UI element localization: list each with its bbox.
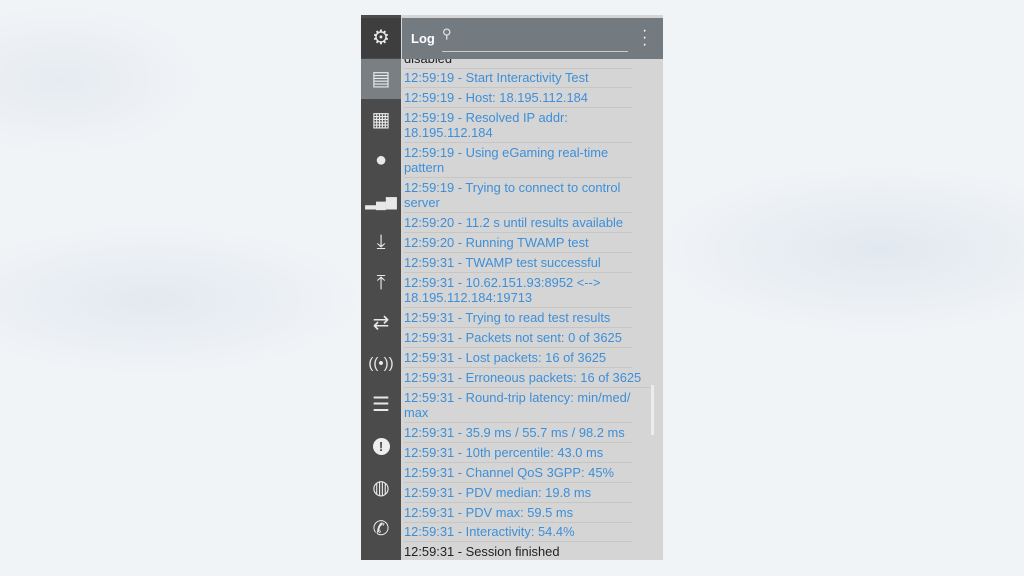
icon: download: ⤓ bbox=[377, 231, 385, 253]
log lines: 12:59:31 - Trying to read test results bbox=[404, 310, 610, 325]
log lines: 12:59:31 - PDV median: 19.8 ms bbox=[404, 485, 591, 500]
header bar bbox=[402, 18, 663, 59]
icon: location: ● bbox=[375, 149, 387, 171]
log lines: 12:59:19 - Start Interactivity Test bbox=[404, 70, 589, 85]
log lines: 12:59:31 - Erroneous packets: 16 of 3625 bbox=[404, 370, 641, 385]
sidebar bbox=[361, 15, 401, 560]
icon: settings bbox=[361, 18, 401, 58]
log lines bbox=[404, 51, 651, 559]
log lines: 12:59:31 - Round-trip latency: min/med/ max bbox=[404, 390, 630, 420]
log lines: 12:59:31 - PDV max: 59.5 ms bbox=[404, 505, 573, 520]
menu dots bbox=[642, 22, 647, 53]
icon: signal: ▂▄▆ bbox=[365, 193, 397, 209]
icon: alert: ! bbox=[379, 439, 383, 454]
menu dots: · bbox=[642, 29, 647, 46]
icon: phone: ✆ bbox=[373, 518, 389, 540]
menu dots: · bbox=[642, 36, 647, 53]
log lines: 12:59:31 - Session finished bbox=[404, 544, 560, 559]
menu dots: · bbox=[642, 22, 647, 39]
log lines: 12:59:31 - Packets not sent: 0 of 3625 bbox=[404, 330, 622, 345]
icon: upload: ⤒ bbox=[377, 272, 385, 294]
log lines: 12:59:20 - Running TWAMP test bbox=[404, 235, 589, 250]
log lines: 12:59:19 - Using eGaming real-time pattern bbox=[404, 145, 608, 175]
log lines: 12:59:31 - Interactivity: 54.4% bbox=[404, 524, 575, 539]
log lines: 12:59:31 - 35.9 ms / 55.7 ms / 98.2 ms bbox=[404, 425, 625, 440]
scrollbar bbox=[651, 385, 654, 435]
icon: antenna: ((•)) bbox=[368, 355, 394, 372]
icon: list: ☰ bbox=[372, 394, 390, 416]
icon: reports: ▦ bbox=[372, 109, 390, 131]
log lines: 12:59:20 - 11.2 s until results available bbox=[404, 215, 623, 230]
log lines: 12:59:31 - 10.62.151.93:8952 <--> 18.195.112.184:19713 bbox=[404, 275, 600, 305]
phone screenshot bbox=[361, 15, 663, 560]
log lines: 12:59:31 - TWAMP test successful bbox=[404, 255, 601, 270]
search field: ⚲ bbox=[442, 26, 452, 41]
log lines: 12:59:31 - Channel QoS 3GPP: 45% bbox=[404, 465, 614, 480]
log lines: disabled bbox=[404, 51, 452, 66]
log lines: 12:59:19 - Host: 18.195.112.184 bbox=[404, 90, 588, 105]
icon: settings: ⚙ bbox=[372, 27, 390, 49]
log lines: 12:59:19 - Trying to connect to control server bbox=[404, 180, 620, 210]
header title: Log bbox=[411, 31, 435, 46]
icon: log (selected) bbox=[361, 59, 401, 99]
icon: log (selected): ▤ bbox=[372, 68, 390, 90]
log lines: 12:59:19 - Resolved IP addr: 18.195.112.184 bbox=[404, 110, 568, 140]
log lines: 12:59:31 - Lost packets: 16 of 3625 bbox=[404, 350, 606, 365]
icon: transfer: ⇄ bbox=[373, 312, 389, 334]
search field bbox=[442, 26, 628, 52]
log lines: 12:59:31 - 10th percentile: 43.0 ms bbox=[404, 445, 603, 460]
icon: globe: ◍ bbox=[372, 477, 390, 499]
